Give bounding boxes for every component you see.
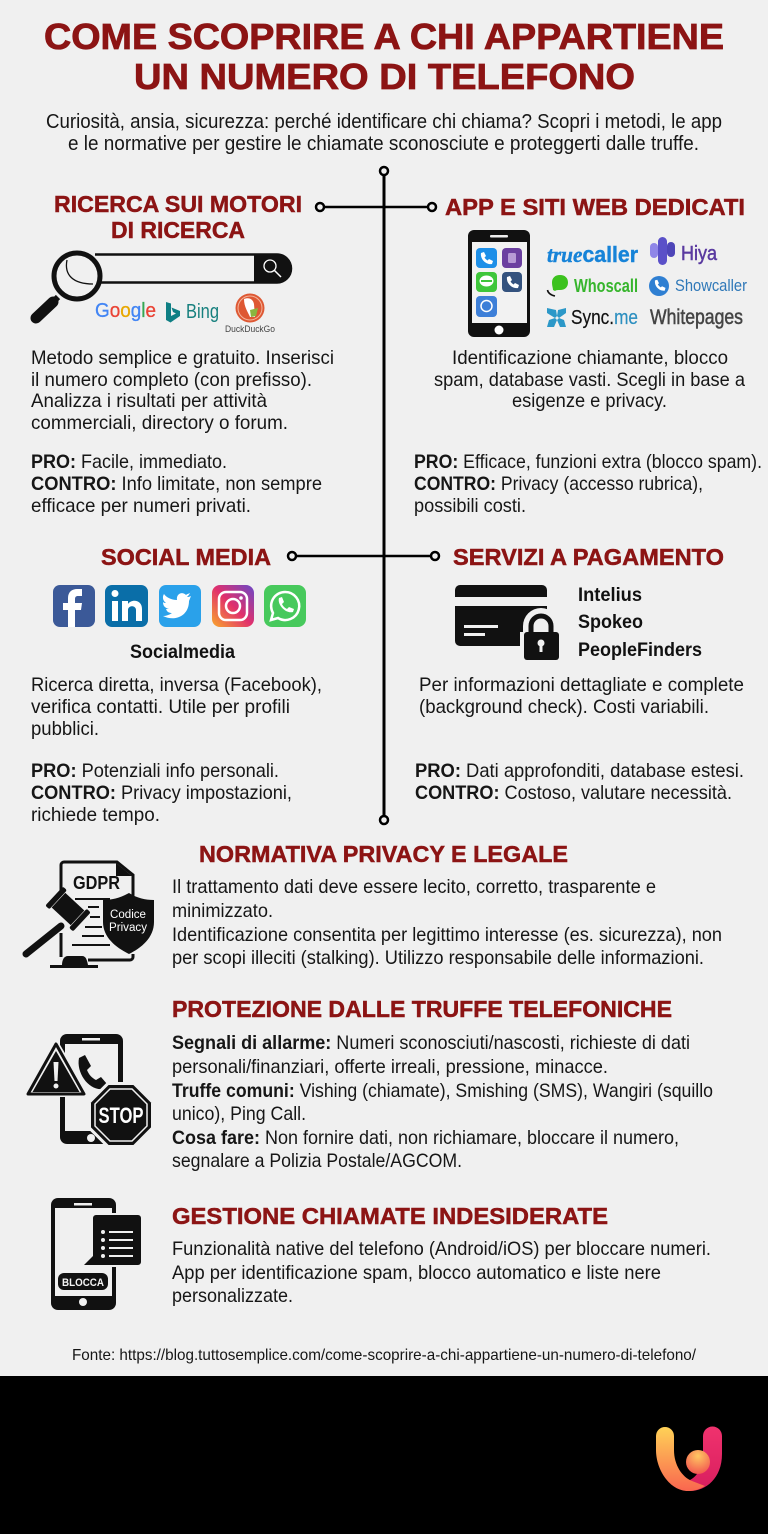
icon: gdpr document gavel shield: Privacy bbox=[109, 922, 147, 934]
icon: gdpr document gavel shield: Codice bbox=[110, 909, 146, 921]
list: servizi: Intelius bbox=[578, 584, 642, 606]
panel: app e siti web bbox=[414, 194, 762, 517]
panel: servizi a pagamento bbox=[415, 544, 744, 804]
heading: normativa privacy e legale: NORMATIVA PRIVACY E LEGALE bbox=[199, 841, 568, 867]
icon: phone warning stop bbox=[21, 1034, 154, 1148]
text: normativa: per scopi illeciti (stalking). Utilizzo responsabile delle informazioni. bbox=[172, 947, 704, 969]
logos: google bing duckduckgo: Bing bbox=[186, 301, 219, 323]
heading: app e siti web dedicati: APP E SITI WEB DEDICATI bbox=[445, 194, 745, 220]
text: descrizione servizi: Per informazioni dettagliate e complete bbox=[419, 674, 744, 696]
panel: normativa privacy bbox=[26, 841, 722, 969]
text: descrizione motori bbox=[31, 347, 334, 434]
text: protezione: Truffe comuni: Vishing (chiamate), Smishing (SMS), Wangiri (squillo bbox=[172, 1080, 713, 1102]
text: pro e contro motori: CONTRO: Info limitate, non sempre bbox=[31, 473, 322, 495]
icon: gdpr document gavel shield: GDPR bbox=[73, 873, 120, 893]
text: pro e contro app bbox=[414, 451, 762, 517]
icon: phone block list: BLOCCA bbox=[62, 1277, 104, 1289]
panel: motori di ricerca bbox=[31, 191, 334, 517]
icon: footer logo bbox=[656, 1426, 722, 1491]
text: protezione: unico), Ping Call. bbox=[172, 1103, 306, 1125]
text: pro e contro motori bbox=[31, 451, 322, 517]
text: pro e contro servizi: PRO: Dati approfonditi, database estesi. bbox=[415, 760, 744, 782]
text: pro e contro social: CONTRO: Privacy impostazioni, bbox=[31, 782, 292, 804]
text: pro e contro social bbox=[31, 760, 292, 826]
text: descrizione app: esigenze e privacy. bbox=[512, 390, 667, 412]
icon: gdpr document gavel shield bbox=[26, 862, 154, 968]
logos: identificazione chiamate: Sync.me bbox=[571, 307, 638, 329]
text: gestione bbox=[172, 1238, 711, 1307]
title: COME SCOPRIRE A CHI APPARTIENE bbox=[44, 16, 724, 57]
logos: identificazione chiamate: Showcaller bbox=[675, 276, 747, 295]
logos: identificazione chiamate: Whoscall bbox=[574, 276, 638, 296]
title bbox=[44, 16, 724, 97]
text: descrizione servizi: (background check). Costi variabili. bbox=[419, 696, 709, 718]
label: socialmedia: Socialmedia bbox=[130, 641, 235, 663]
heading: protezione dalle truffe: PROTEZIONE DALLE TRUFFE TELEFONICHE bbox=[172, 996, 672, 1022]
text: protezione bbox=[172, 1032, 713, 1172]
panel: protezione truffe bbox=[21, 996, 713, 1172]
source line: Fonte: https://blog.tuttosemplice.com/come-scoprire-a-chi-appartiene-un-numero-di-telefono/ bbox=[72, 1347, 697, 1364]
text: normativa bbox=[172, 876, 722, 969]
text: descrizione social: pubblici. bbox=[31, 718, 99, 740]
text: gestione: Funzionalità native del telefono (Android/iOS) per bloccare numeri. bbox=[172, 1238, 711, 1260]
icon: phone block list bbox=[51, 1198, 143, 1310]
text: descrizione motori: commerciali, directory o forum. bbox=[31, 412, 288, 434]
text: descrizione social: verifica contatti. Utile per profili bbox=[31, 696, 290, 718]
text: pro e contro app: possibili costi. bbox=[414, 495, 526, 517]
logos: google bing duckduckgo bbox=[95, 294, 275, 334]
icon: search bar and magnifier bbox=[36, 253, 292, 318]
title: UN NUMERO DI TELEFONO bbox=[134, 56, 635, 97]
text: normativa: minimizzato. bbox=[172, 900, 273, 922]
text: protezione: Cosa fare: Non fornire dati, non richiamare, bloccare il numero, bbox=[172, 1127, 679, 1149]
logos: identificazione chiamate: Hiya bbox=[681, 243, 718, 265]
text: normativa: Il trattamento dati deve essere lecito, corretto, trasparente e bbox=[172, 876, 656, 898]
panel: gestione chiamate bbox=[51, 1198, 711, 1310]
text: pro e contro servizi: CONTRO: Costoso, valutare necessità. bbox=[415, 782, 732, 804]
text: descrizione app: Identificazione chiamante, blocco bbox=[452, 347, 728, 369]
text: pro e contro social: richiede tempo. bbox=[31, 804, 160, 826]
text: descrizione social bbox=[31, 674, 322, 740]
logos: identificazione chiamate bbox=[547, 237, 747, 329]
text: descrizione motori: Metodo semplice e gratuito. Inserisci bbox=[31, 347, 334, 369]
heading: gestione chiamate indesiderate: GESTIONE CHIAMATE INDESIDERATE bbox=[172, 1203, 608, 1229]
text: pro e contro motori: efficace per numeri privati. bbox=[31, 495, 251, 517]
heading: ricerca sui motori bbox=[54, 191, 302, 243]
text: descrizione motori: Analizza i risultati per attività bbox=[31, 390, 267, 412]
text: descrizione servizi bbox=[419, 674, 744, 718]
heading: ricerca sui motori: RICERCA SUI MOTORI bbox=[54, 191, 302, 217]
panel: social media bbox=[31, 544, 322, 826]
icons: social networks bbox=[53, 585, 306, 627]
text: pro e contro social: PRO: Potenziali info personali. bbox=[31, 760, 279, 782]
text: descrizione motori: il numero completo (con prefisso). bbox=[31, 369, 312, 391]
text: protezione: personali/finanziari, offerte irreali, pressione, minacce. bbox=[172, 1056, 608, 1078]
logos: identificazione chiamate: truecaller bbox=[547, 242, 638, 267]
text: descrizione app bbox=[434, 347, 745, 412]
intro text: Curiosità, ansia, sicurezza: perché identificare chi chiama? Scopri i metodi, le app bbox=[46, 110, 722, 133]
text: gestione: App per identificazione spam, blocco automatico e liste nere bbox=[172, 1262, 661, 1284]
logos: google bing duckduckgo: DuckDuckGo bbox=[225, 324, 275, 334]
logos: google bing duckduckgo: Google bbox=[95, 300, 156, 322]
list: servizi: Spokeo bbox=[578, 611, 643, 633]
intro text: e le normative per gestire le chiamate sconosciute e proteggerti dalle truffe. bbox=[68, 132, 699, 155]
heading: ricerca sui motori: DI RICERCA bbox=[111, 217, 245, 243]
central timeline connector bbox=[288, 167, 439, 824]
text: pro e contro servizi bbox=[415, 760, 744, 804]
heading: servizi a pagamento: SERVIZI A PAGAMENTO bbox=[453, 544, 724, 570]
icon: credit card with padlock bbox=[455, 585, 562, 662]
icon: phone warning stop: STOP bbox=[98, 1103, 144, 1128]
text: descrizione social: Ricerca diretta, inversa (Facebook), bbox=[31, 674, 322, 696]
text: protezione: Segnali di allarme: Numeri sconosciuti/nascosti, richieste di dati bbox=[172, 1032, 690, 1054]
text: gestione: personalizzate. bbox=[172, 1285, 293, 1307]
text: pro e contro app: CONTRO: Privacy (accesso rubrica), bbox=[414, 473, 703, 495]
footer band bbox=[0, 1376, 768, 1534]
icon: smartphone with apps bbox=[468, 230, 530, 337]
intro text bbox=[46, 110, 722, 155]
heading: social media: SOCIAL MEDIA bbox=[101, 544, 271, 570]
list: servizi: PeopleFinders bbox=[578, 639, 702, 661]
list: servizi bbox=[578, 584, 702, 661]
text: protezione: segnalare a Polizia Postale/AGCOM. bbox=[172, 1150, 462, 1172]
logos: identificazione chiamate: Whitepages bbox=[650, 306, 743, 329]
text: descrizione app: spam, database vasti. Scegli in base a bbox=[434, 369, 745, 391]
text: normativa: Identificazione consentita per legittimo interesse (es. sicurezza), non bbox=[172, 924, 722, 946]
text: pro e contro motori: PRO: Facile, immediato. bbox=[31, 451, 227, 473]
